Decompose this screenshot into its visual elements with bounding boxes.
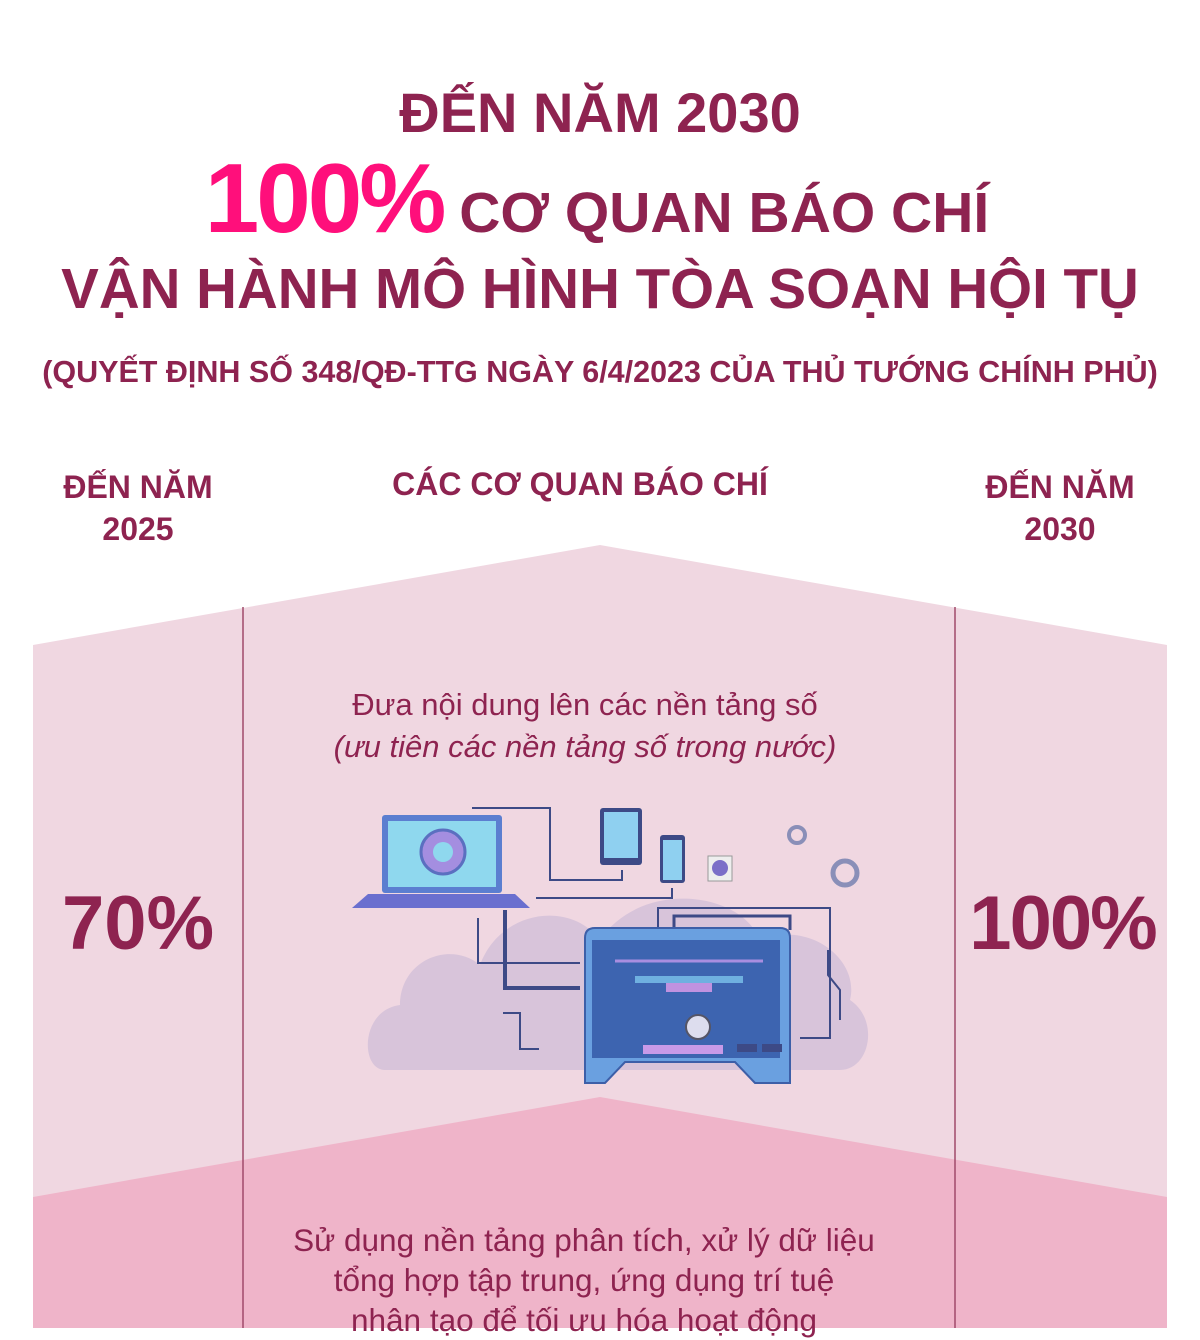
item 2 text: Sử dụng nền tảng phân tích, xử lý dữ liệu [293,1222,875,1258]
item 2 text: nhân tạo để tối ưu hóa hoạt động [351,1302,817,1338]
header: 2030: ĐẾN NĂM [985,469,1135,505]
item 1 text: Đưa nội dung lên các nền tảng số [352,687,818,722]
header: 2030 [985,469,1135,547]
value 100%: 100% [969,881,1156,966]
item 2 text: tổng hợp tập trung, ứng dụng trí tuệ [334,1262,834,1298]
header: 2025: ĐẾN NĂM [63,469,213,505]
header: 2025: 2025 [102,511,174,547]
title line 3: VẬN HÀNH MÔ HÌNH TÒA SOẠN HỘI TỤ [61,257,1139,320]
header: agencies: CÁC CƠ QUAN BÁO CHÍ [392,466,768,502]
header: 2030: 2030 [1024,511,1096,547]
header: 2025 [63,469,213,547]
item 1 text [334,687,836,764]
tablet [600,808,642,865]
laptop [382,815,502,893]
subtitle: (QUYẾT ĐỊNH SỐ 348/QĐ-TTG NGÀY 6/4/2023 CỦA THỦ TƯỚNG CHÍNH PHỦ) [42,355,1158,389]
illustration: devices and 3D printer [352,807,868,1084]
title line 1: ĐẾN NĂM 2030 [399,81,801,144]
item 2 text [293,1222,875,1338]
item 1 text: (ưu tiên các nền tảng số trong nước) [334,729,836,764]
globe [708,856,732,881]
phone [660,835,685,883]
gears [789,827,805,843]
value 70%: 70% [62,881,214,966]
title line 2: 100% CƠ QUAN BÁO CHÍ [205,143,989,253]
printer [585,928,790,1083]
